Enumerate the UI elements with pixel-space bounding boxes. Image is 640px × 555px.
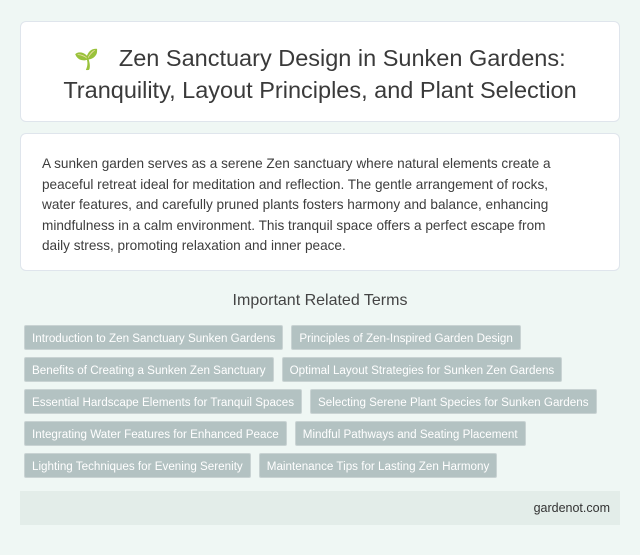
tags: Optimal Layout Strategies for Sunken Zen Gardens: [290, 364, 554, 377]
title: Tranquility, Layout Principles, and Plant Selection: [63, 77, 577, 103]
footer: gardenot.com: [534, 501, 610, 515]
tags: Principles of Zen-Inspired Garden Design: [299, 332, 513, 345]
tags: Selecting Serene Plant Species for Sunken Gardens: [318, 396, 589, 409]
footer: [20, 491, 620, 525]
title: 🌱 Zen Sanctuary Design in Sunken Gardens:: [74, 45, 566, 71]
tags: Benefits of Creating a Sunken Zen Sanctuary: [32, 364, 266, 377]
tags: Mindful Pathways and Seating Placement: [303, 428, 518, 441]
tags: [24, 325, 597, 478]
title: [63, 45, 577, 103]
tags: Lighting Techniques for Evening Serenity: [32, 460, 243, 473]
section heading: Important Related Terms: [233, 292, 407, 309]
tags: Introduction to Zen Sanctuary Sunken Gardens: [32, 332, 275, 345]
tags: Integrating Water Features for Enhanced Peace: [32, 428, 279, 441]
description card: [20, 133, 620, 271]
header card: [20, 21, 620, 122]
tags: Essential Hardscape Elements for Tranquil Spaces: [32, 396, 294, 409]
tags: Maintenance Tips for Lasting Zen Harmony: [267, 460, 489, 473]
description text: A sunken garden serves as a serene Zen sanctuary where natural elements create a peaceful retreat ideal for meditation and reflection. The gentle arrangement of rocks, water features, and carefully pruned plants fosters harmony and balance, enhancing mindfulness in a calm environment. This tranquil space offers a perfect escape from daily stress, promoting relaxation and inner peace.: [42, 156, 551, 253]
